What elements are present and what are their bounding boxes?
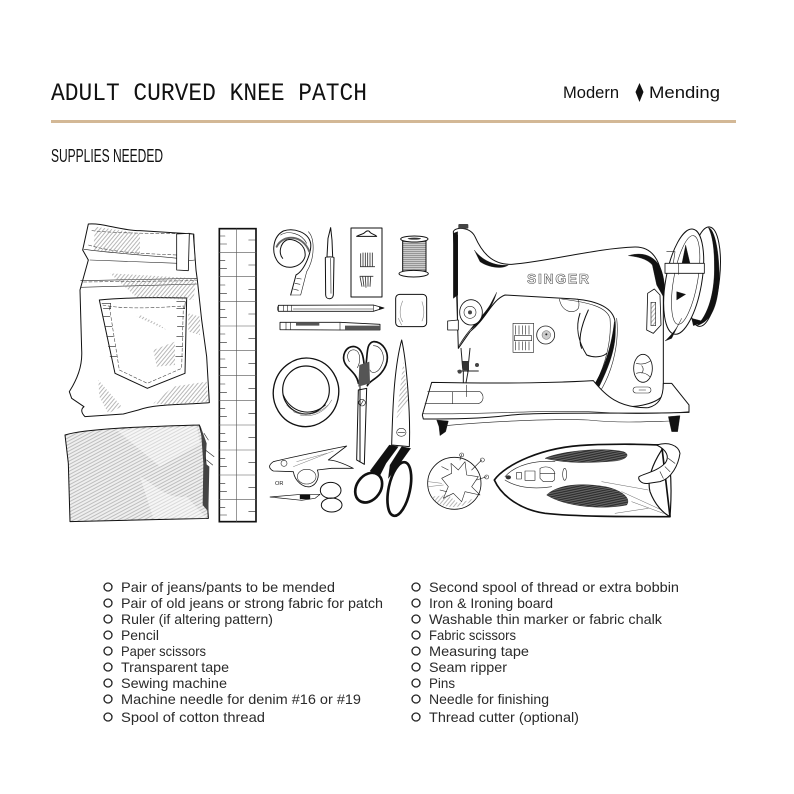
checklist: left column: Transparent tape (121, 659, 229, 675)
checklist: left column: Spool of cotton thread (121, 709, 265, 725)
icon: pin cushion (428, 453, 489, 509)
checklist: right column: Seam ripper (429, 659, 507, 675)
checklist: right column: Measuring tape (429, 643, 529, 659)
checklist: right column: Washable thin marker or fabric chalk (429, 611, 663, 627)
logo: Modern Mending: Modern (563, 83, 619, 102)
icon: transparent tape (267, 352, 345, 433)
icon: fabric shears (350, 340, 415, 518)
checklist: left column: Machine needle for denim #16 or #19 (121, 691, 361, 707)
checklist: left column: Sewing machine (121, 675, 227, 691)
title: ADULT CURVED KNEE PATCH (51, 79, 367, 108)
icon: jeans (65, 224, 214, 522)
icon: marker (280, 322, 380, 330)
icon: thread cutter (270, 446, 353, 487)
header rule (51, 120, 736, 123)
checklist: left column (104, 579, 383, 725)
checklist: left column: Pencil (121, 627, 159, 643)
icon: measuring tape (274, 230, 313, 295)
heading: supplies needed: SUPPLIES NEEDED (51, 145, 163, 166)
checklist: right column: Pins (429, 675, 455, 691)
icon: paper scissors (344, 342, 387, 464)
checklist: left column: Paper scissors (121, 643, 206, 659)
handwheel (657, 225, 725, 341)
checklist: left column: Pair of jeans/pants to be mended (121, 579, 335, 595)
checklist: right column: Thread cutter (optional) (429, 709, 579, 725)
icon: iron (494, 444, 680, 517)
checklist: right column (412, 579, 679, 725)
icon: thread cutter: OR (275, 481, 283, 487)
icon: small scissors (270, 482, 342, 512)
checklist: right column: Iron & Ironing board (429, 595, 553, 611)
logo: Modern Mending: Mending (649, 83, 720, 102)
checklist: left column: Pair of old jeans or strong fabric for patch (121, 595, 383, 611)
brand text: SINGER (527, 270, 589, 286)
checklist: left column: Ruler (if altering pattern) (121, 611, 273, 627)
needle assembly (458, 348, 478, 388)
icon: pencil (277, 305, 384, 311)
checklist: right column: Second spool of thread or extra bobbin (429, 579, 679, 595)
icon: old fabric (65, 425, 214, 522)
logo: Modern Mending (563, 83, 720, 102)
base (422, 381, 689, 419)
checklist: right column: Needle for finishing (429, 691, 549, 707)
icon: spool of thread (399, 236, 428, 277)
icon: sewing machine (422, 224, 725, 436)
icon: ruler (219, 229, 256, 522)
icon: needle packet (351, 228, 382, 297)
checklist: right column: Fabric scissors (429, 627, 516, 643)
icon: fabric chalk (396, 294, 427, 327)
icon: seam ripper (325, 228, 334, 299)
